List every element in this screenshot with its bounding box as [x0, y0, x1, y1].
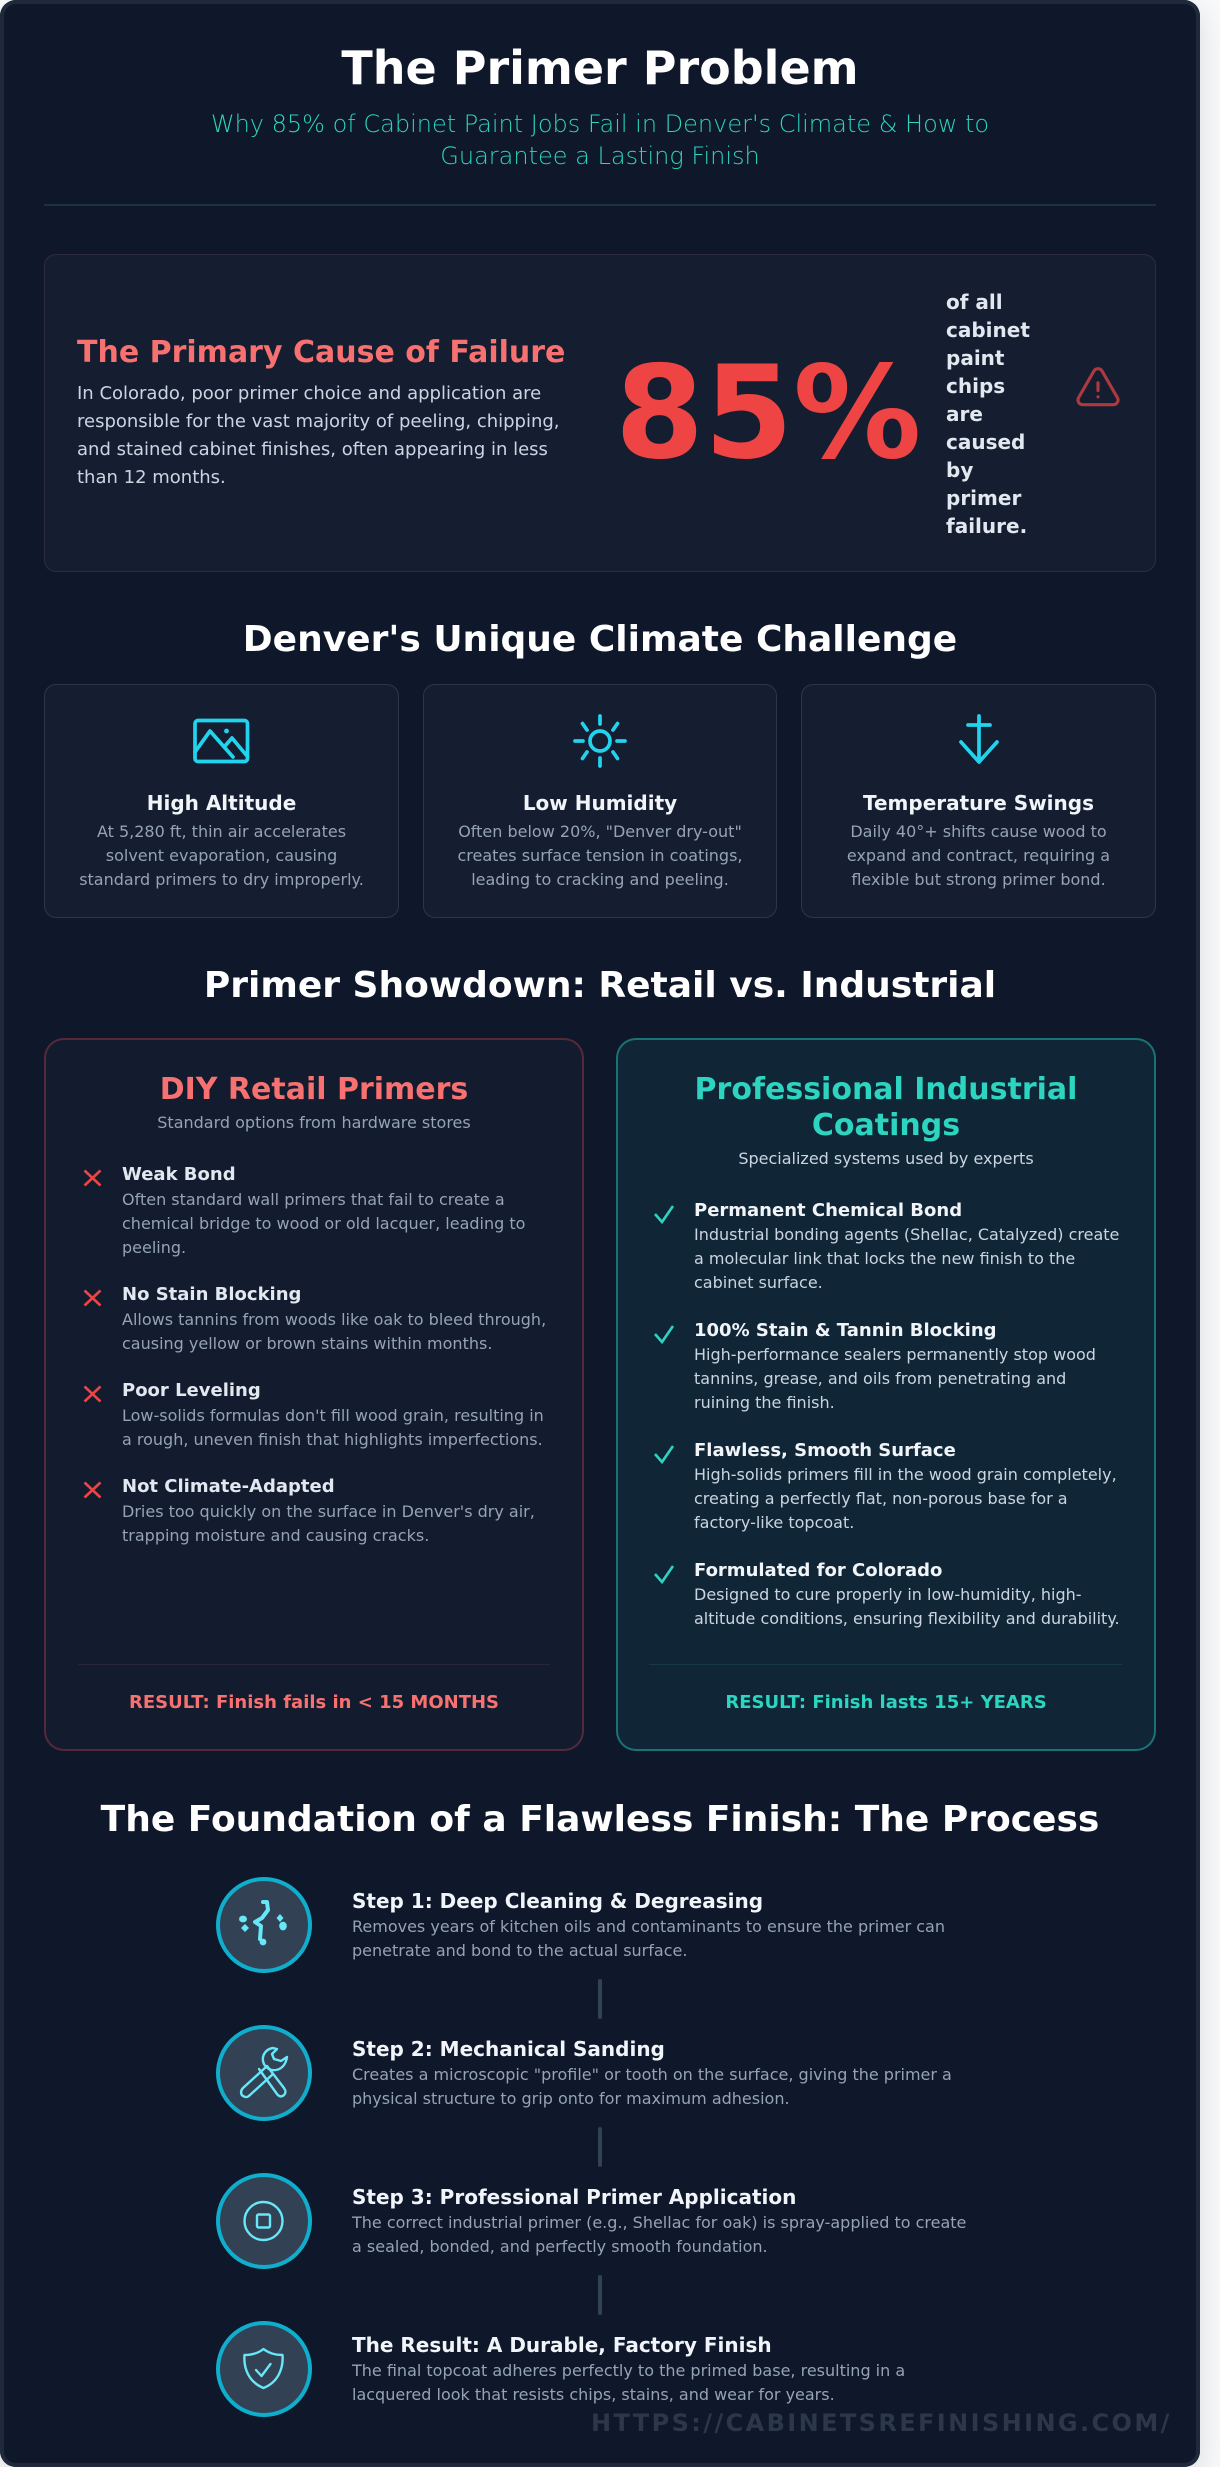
text block: statistic caption: of all — [946, 290, 1003, 314]
icon: spray target — [216, 2173, 312, 2269]
item: stain and tannin blocking — [654, 1320, 1096, 1412]
step 2: mechanical sanding — [216, 2025, 952, 2121]
step text — [352, 2359, 905, 2407]
panel: high altitude — [44, 684, 399, 918]
text block: statistic caption: cabinet — [946, 318, 1030, 342]
item: not climate-adapted — [84, 1476, 535, 1545]
panel subtitle: Specialized systems used by experts — [738, 1149, 1034, 1168]
heading: climate challenge: Denver's Unique Climate Challenge — [243, 619, 957, 660]
step 4: the result — [217, 2321, 997, 2417]
panel title: Professional Industrial — [695, 1072, 1077, 1107]
icon: check — [654, 1205, 674, 1224]
item text: cabinet surface. — [694, 1273, 823, 1292]
step text — [352, 2065, 952, 2108]
text block: primary cause description: and stained cabinet finishes, often appearing in less — [77, 439, 548, 460]
item text: chemical bridge to wood or old lacquer, leading to — [122, 1214, 525, 1233]
item: formulated for Colorado — [654, 1560, 1120, 1628]
card text: At 5,280 ft, thin air accelerates — [97, 822, 346, 841]
step title: Step 1: Deep Cleaning & Degreasing — [352, 1889, 763, 1913]
card text: Often below 20%, "Denver dry-out" — [458, 822, 742, 841]
text block: primary cause description — [77, 383, 560, 488]
panel title: Coatings — [812, 1108, 960, 1143]
icon: cleaning sparkle — [216, 1877, 312, 1973]
icon: cross — [84, 1482, 102, 1498]
card title: Temperature Swings — [863, 791, 1094, 815]
panel: low humidity — [423, 684, 777, 918]
heading: the process: The Foundation of a Flawless Finish: The Process — [101, 1799, 1099, 1840]
card text: creates surface tension in coatings, — [458, 846, 742, 865]
panel: temperature swings — [801, 684, 1156, 918]
item title: Formulated for Colorado — [694, 1560, 942, 1581]
text block: statistic caption: by — [946, 458, 973, 482]
icon: cross — [84, 1170, 102, 1186]
item text — [694, 1465, 1117, 1532]
item text: tannins, grease, and oils from penetrating and — [694, 1369, 1066, 1388]
icon: wrench and screwdriver — [216, 2025, 312, 2121]
item title: Permanent Chemical Bond — [694, 1200, 962, 1221]
result: fails in under 15 months: RESULT: Finish fails in < 15 MONTHS — [129, 1692, 499, 1713]
item title: Weak Bond — [122, 1164, 236, 1185]
text block: statistic caption: primer — [946, 486, 1021, 510]
card text — [847, 822, 1110, 889]
card text: flexible but strong primer bond. — [851, 870, 1106, 889]
item text: peeling. — [122, 1238, 186, 1257]
panel subtitle: Standard options from hardware stores — [157, 1113, 471, 1132]
step text: lacquered look that resists chips, stains, and wear for years. — [352, 2385, 835, 2404]
step 1: deep cleaning — [216, 1877, 945, 1973]
item text: Dries too quickly on the surface in Denver's dry air, — [122, 1502, 535, 1521]
text block: primary cause description: In Colorado, poor primer choice and application are — [77, 383, 541, 404]
step title: Step 2: Mechanical Sanding — [352, 2037, 665, 2061]
item text: Often standard wall primers that fail to create a — [122, 1190, 505, 1209]
panel: primary cause of failure — [44, 254, 1156, 572]
item: no stain blocking — [84, 1284, 546, 1353]
item text: Low-solids formulas don't fill wood grain, resulting in — [122, 1406, 544, 1425]
subtitle: Guarantee a Lasting Finish — [440, 142, 760, 170]
card text: leading to cracking and peeling. — [471, 870, 729, 889]
step text: The final topcoat adheres perfectly to the primed base, resulting in a — [352, 2361, 905, 2380]
step text — [352, 2211, 966, 2259]
step text: physical structure to grip onto for maximum adhesion. — [352, 2089, 790, 2108]
panel: DIY retail primers — [44, 1038, 584, 1751]
item text: High-solids primers fill in the wood grain completely, — [694, 1465, 1117, 1484]
item text: a molecular link that locks the new finish to the — [694, 1249, 1075, 1268]
item text: ruining the finish. — [694, 1393, 835, 1412]
icon: warning triangle — [1076, 367, 1120, 406]
item text — [122, 1406, 544, 1449]
card text: solvent evaporation, causing — [106, 846, 337, 865]
item text — [694, 1585, 1120, 1628]
panel title — [695, 1072, 1077, 1143]
statistic: 85%: 85% — [615, 339, 921, 488]
connector — [598, 2127, 602, 2167]
item text — [694, 1225, 1119, 1292]
icon: check — [654, 1325, 674, 1344]
item text — [122, 1190, 525, 1257]
step 3: primer application — [217, 2173, 997, 2269]
item title: Poor Leveling — [122, 1380, 261, 1401]
card title: Low Humidity — [523, 791, 677, 815]
card text: standard primers to dry improperly. — [79, 870, 364, 889]
item: permanent chemical bond — [654, 1200, 1119, 1292]
item text: factory-like topcoat. — [694, 1513, 854, 1532]
item title: Flawless, Smooth Surface — [694, 1440, 956, 1461]
card text: expand and contract, requiring a — [847, 846, 1110, 865]
step text — [352, 1917, 945, 1960]
item text: High-performance sealers permanently stop wood — [694, 1345, 1096, 1364]
item text: Designed to cure properly in low-humidity, high- — [694, 1585, 1082, 1604]
step text: The correct industrial primer (e.g., Shellac for oak) is spray-applied to create — [352, 2213, 966, 2232]
item title: 100% Stain & Tannin Blocking — [694, 1320, 997, 1341]
card text — [79, 822, 364, 889]
item text: causing yellow or brown stains within months. — [122, 1334, 492, 1353]
item text — [122, 1310, 546, 1353]
icon: cross — [84, 1290, 102, 1306]
title: The Primer Problem — [341, 41, 859, 95]
text block: statistic caption: chips — [946, 374, 1005, 398]
subtitle — [211, 110, 989, 170]
header — [44, 41, 1156, 206]
item: flawless smooth surface — [654, 1440, 1117, 1532]
step title: Step 3: Professional Primer Application — [352, 2185, 796, 2209]
panel title: DIY Retail Primers — [160, 1072, 468, 1107]
icon: check — [654, 1445, 674, 1464]
result: lasts 15+ years: RESULT: Finish lasts 15+ YEARS — [725, 1692, 1047, 1713]
item text: altitude conditions, ensuring flexibility and durability. — [694, 1609, 1120, 1628]
item text — [122, 1502, 535, 1545]
item text: a rough, uneven finish that highlights imperfections. — [122, 1430, 543, 1449]
card title: High Altitude — [147, 791, 296, 815]
item text: Industrial bonding agents (Shellac, Catalyzed) create — [694, 1225, 1119, 1244]
text block: statistic caption: caused — [946, 430, 1025, 454]
subtitle: Why 85% of Cabinet Paint Jobs Fail in Denver's Climate & How to — [211, 110, 989, 138]
step text: a sealed, bonded, and perfectly smooth foundation. — [352, 2237, 768, 2256]
step text: Removes years of kitchen oils and contaminants to ensure the primer can — [352, 1917, 945, 1936]
icon: check — [654, 1565, 674, 1584]
step title: The Result: A Durable, Factory Finish — [352, 2333, 772, 2357]
card text — [458, 822, 742, 889]
item title: No Stain Blocking — [122, 1284, 301, 1305]
heading: primer showdown: Primer Showdown: Retail vs. Industrial — [204, 965, 996, 1006]
item: poor leveling — [84, 1380, 544, 1449]
text block: statistic caption: are — [946, 402, 983, 426]
card text: Daily 40°+ shifts cause wood to — [850, 822, 1107, 841]
text block: primary cause description: responsible for the vast majority of peeling, chipping, — [77, 411, 560, 432]
connector — [598, 2275, 602, 2315]
text block: statistic caption: failure. — [946, 514, 1027, 538]
text block: statistic caption: paint — [946, 346, 1004, 370]
text block: primary cause description: than 12 months. — [77, 467, 226, 488]
item text: Allows tannins from woods like oak to bleed through, — [122, 1310, 546, 1329]
item: weak bond — [84, 1164, 525, 1257]
watermark url: HTTPS://CABINETSREFINISHING.COM/ — [591, 2409, 1172, 2437]
icon: cross — [84, 1386, 102, 1402]
icon: arrow — [959, 714, 999, 764]
step text: Creates a microscopic "profile" or tooth on the surface, giving the primer a — [352, 2065, 952, 2084]
item text — [694, 1345, 1096, 1412]
heading: primary cause: The Primary Cause of Failure — [77, 335, 565, 370]
connector — [598, 1979, 602, 2019]
icon: shield check — [216, 2321, 312, 2417]
icon: mountain image — [193, 718, 250, 764]
panel: professional industrial coatings — [616, 1038, 1156, 1751]
icon: sun — [573, 714, 627, 768]
item text: trapping moisture and causing cracks. — [122, 1526, 429, 1545]
item title: Not Climate-Adapted — [122, 1476, 335, 1497]
step text: penetrate and bond to the actual surface. — [352, 1941, 687, 1960]
item text: creating a perfectly flat, non-porous base for a — [694, 1489, 1068, 1508]
text block: statistic caption — [946, 290, 1030, 538]
